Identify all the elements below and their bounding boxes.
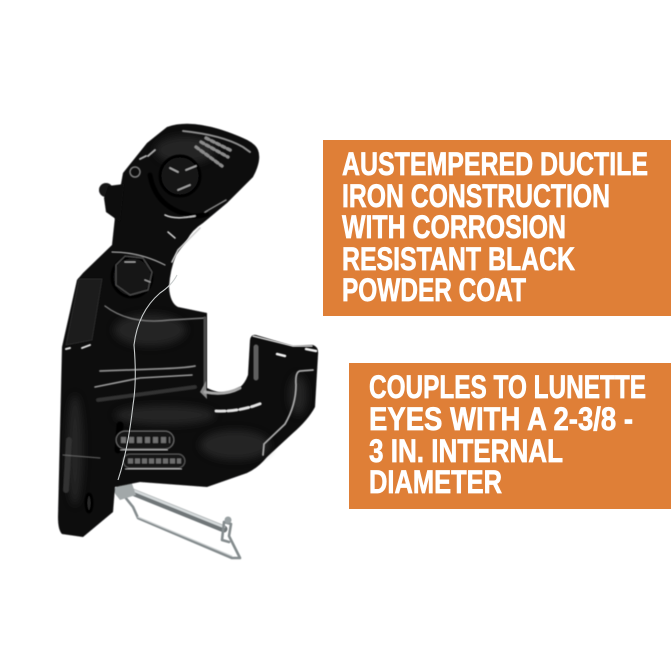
callout text: construction: RESISTANT BLACK xyxy=(342,241,575,277)
callout text: lunette eyes: 3 IN. INTERNAL xyxy=(369,433,563,469)
product photo: pintle hitch xyxy=(58,124,318,558)
callout text: lunette eyes xyxy=(369,369,646,500)
safety pin and clip xyxy=(112,478,240,558)
latch knob xyxy=(99,183,124,222)
safety wire xyxy=(118,275,177,480)
lever details: hex bolt and stamped lettering xyxy=(130,131,250,262)
pivot bolt and bracket xyxy=(66,252,205,349)
housing ledges and highlights xyxy=(63,318,316,512)
hitch body silhouette xyxy=(58,124,318,537)
callout text: lunette eyes: EYES WITH A 2-3/8 - xyxy=(369,401,633,437)
callout text: construction: WITH CORROSION xyxy=(342,209,566,245)
panel: material callout xyxy=(323,140,671,316)
panel background xyxy=(349,363,671,509)
panel background xyxy=(323,140,671,316)
body shading xyxy=(67,136,307,505)
panel: coupling callout xyxy=(349,363,671,509)
callout text: lunette eyes: DIAMETER xyxy=(369,464,502,500)
callout text: construction xyxy=(342,146,648,308)
cast maker plates xyxy=(116,431,185,469)
callout text: construction: POWDER COAT xyxy=(342,272,526,308)
